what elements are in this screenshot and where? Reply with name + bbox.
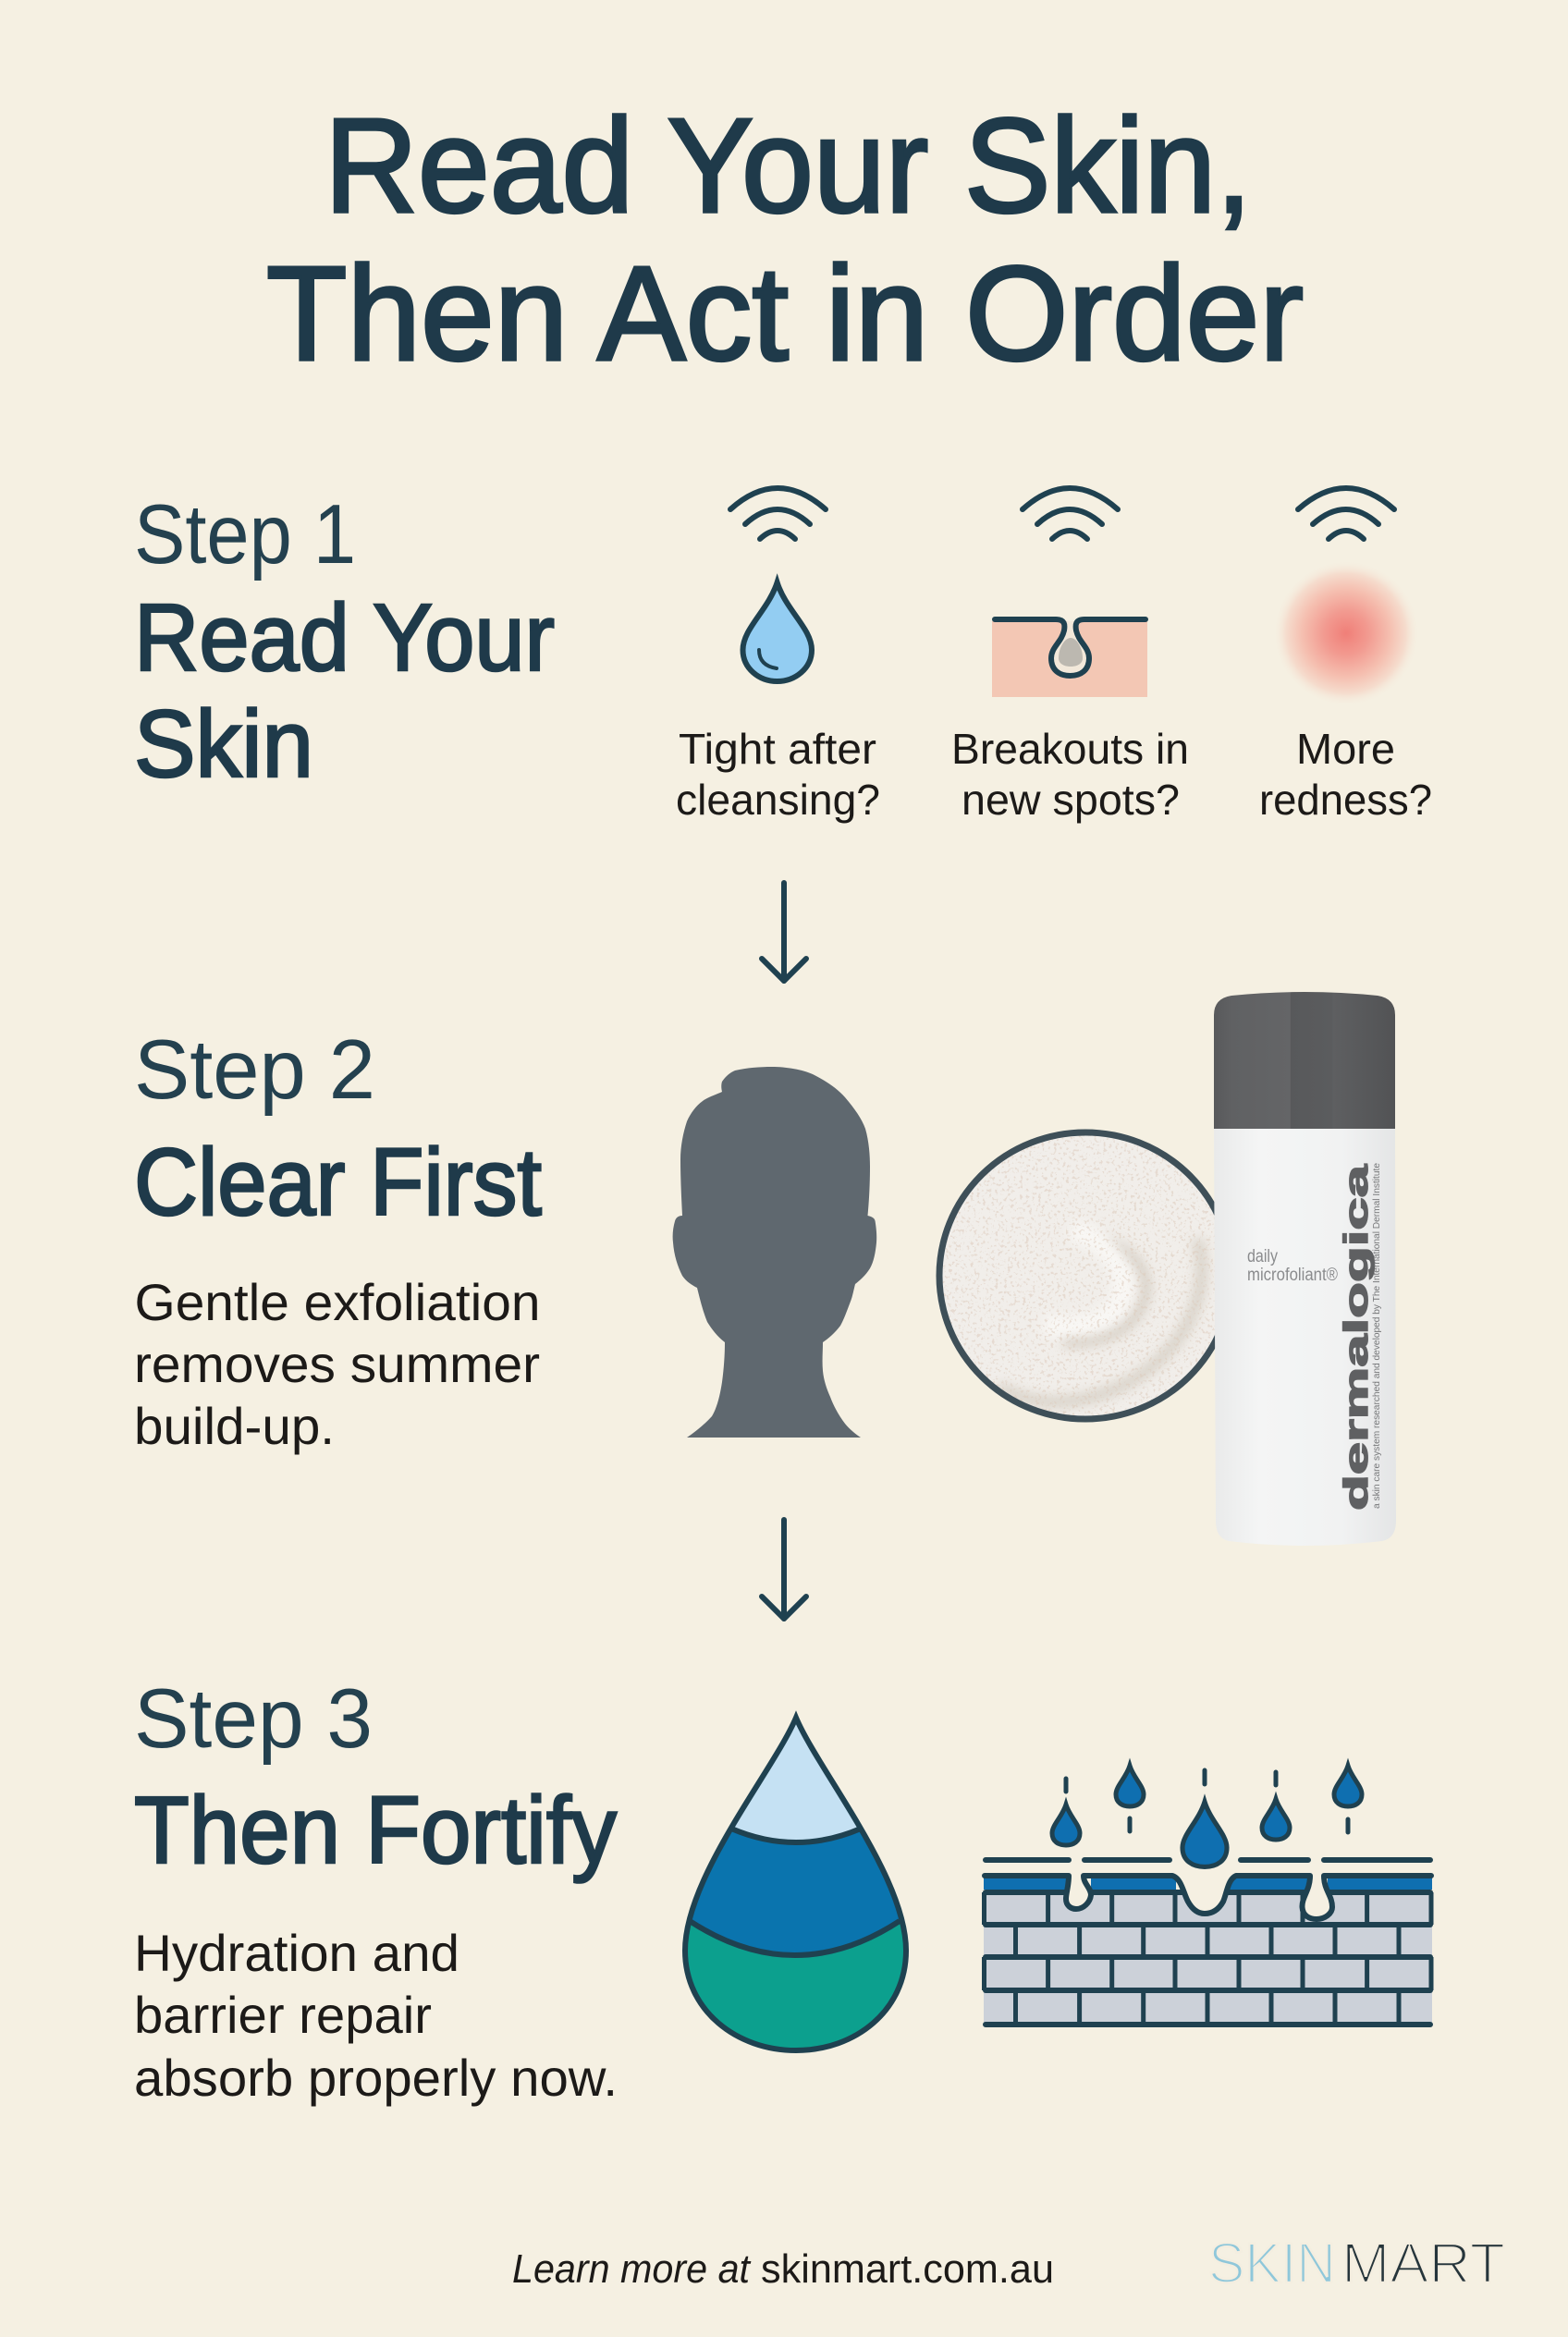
icon: head silhouette	[673, 1067, 876, 1438]
label: more redness: redness?	[1259, 776, 1432, 824]
arrow: step 1 to step 2	[762, 883, 806, 981]
panel: breakouts in new spots sign	[951, 488, 1189, 824]
text: step 3 description: barrier repair	[134, 1986, 432, 2044]
label: breakouts in new spots: new spots?	[962, 776, 1180, 824]
icon: signal arcs	[1298, 488, 1394, 539]
label: tight after cleansing: Tight after	[679, 725, 876, 773]
blue moisture layer	[984, 1878, 1432, 1890]
label: breakouts in new spots	[951, 725, 1189, 824]
falling droplets	[1052, 1766, 1362, 1866]
bottle cap	[1214, 992, 1395, 1129]
bottle label: daily microfoliant: daily	[1247, 1247, 1278, 1266]
bottle label: daily microfoliant	[1247, 1247, 1338, 1285]
bottle body	[1214, 1128, 1396, 1546]
text: step 3 description: Hydration and	[134, 1924, 459, 1982]
panel: step 3 text: Then Fortify	[134, 1777, 617, 1883]
label: more redness: More	[1296, 725, 1395, 773]
icon: skin barrier bricks with drops	[984, 1766, 1432, 2025]
label: breakouts in new spots: Breakouts in	[951, 725, 1189, 773]
footer: learn more link: skinmart.com.au	[761, 2246, 1054, 2292]
text: step 2 description: Gentle exfoliation	[135, 1273, 540, 1331]
label: tight after cleansing: cleansing?	[676, 776, 880, 824]
logo: SkinMart: SKIN	[1208, 2232, 1336, 2294]
icon: powder circle	[937, 1131, 1233, 1421]
bottle label: daily microfoliant: microfoliant®	[1247, 1266, 1338, 1285]
icon: water drop	[743, 582, 812, 681]
text: step 2 description: build-up.	[134, 1397, 335, 1455]
panel: tight after cleansing sign	[676, 488, 880, 824]
panel: step 1 heading: Read Your	[134, 584, 555, 691]
droplet motion ticks	[1066, 1770, 1348, 1832]
text: step 2 description: removes summer	[134, 1335, 540, 1393]
title	[266, 91, 1304, 388]
arrow: step 2 to step 3	[762, 1520, 806, 1619]
icon: signal arcs	[1023, 488, 1118, 539]
bottle brand: dermalogica: dermalogica	[1337, 1163, 1375, 1511]
panel: step 3 text	[134, 1672, 618, 2107]
panel: step 1 heading: Skin	[134, 691, 313, 797]
bricks	[984, 1892, 1432, 2025]
logo: SkinMart	[1208, 2232, 1505, 2294]
barrier surface with pores	[985, 1876, 1431, 1919]
panel: more redness sign	[1259, 488, 1432, 824]
icon: signal arcs	[730, 488, 826, 539]
panel: step 2 text: Clear First	[134, 1129, 542, 1235]
logo: SkinMart: MART	[1341, 2232, 1505, 2294]
title: Read Your Skin,	[325, 91, 1252, 240]
icon: clogged pore	[992, 619, 1147, 697]
bottle small print: a skin care system researched and developed by The International Dermal Institute	[1372, 1163, 1382, 1509]
icon: layered hydration drop	[682, 1710, 909, 2053]
text: step 3 description	[134, 1924, 618, 2107]
label: more redness	[1259, 725, 1432, 824]
panel: step 1 heading	[134, 488, 555, 797]
text: step 2 description	[134, 1273, 540, 1455]
panel: step 2 text: Step 2	[134, 1023, 375, 1117]
icon: redness patch	[1273, 560, 1419, 706]
panel: step 3 text: Step 3	[134, 1672, 373, 1766]
text: step 3 description: absorb properly now.	[134, 2049, 618, 2107]
top dashes	[986, 1857, 1430, 1863]
title: Then Act in Order	[266, 239, 1304, 388]
panel: step 2 text	[134, 1023, 542, 1455]
label: tight after cleansing	[676, 725, 880, 824]
footer: learn more link: Learn more at	[512, 2246, 752, 2292]
panel: step 1 heading: Step 1	[134, 488, 356, 581]
footer: learn more link	[512, 2246, 1054, 2292]
product: dermalogica bottle	[1214, 992, 1396, 1546]
